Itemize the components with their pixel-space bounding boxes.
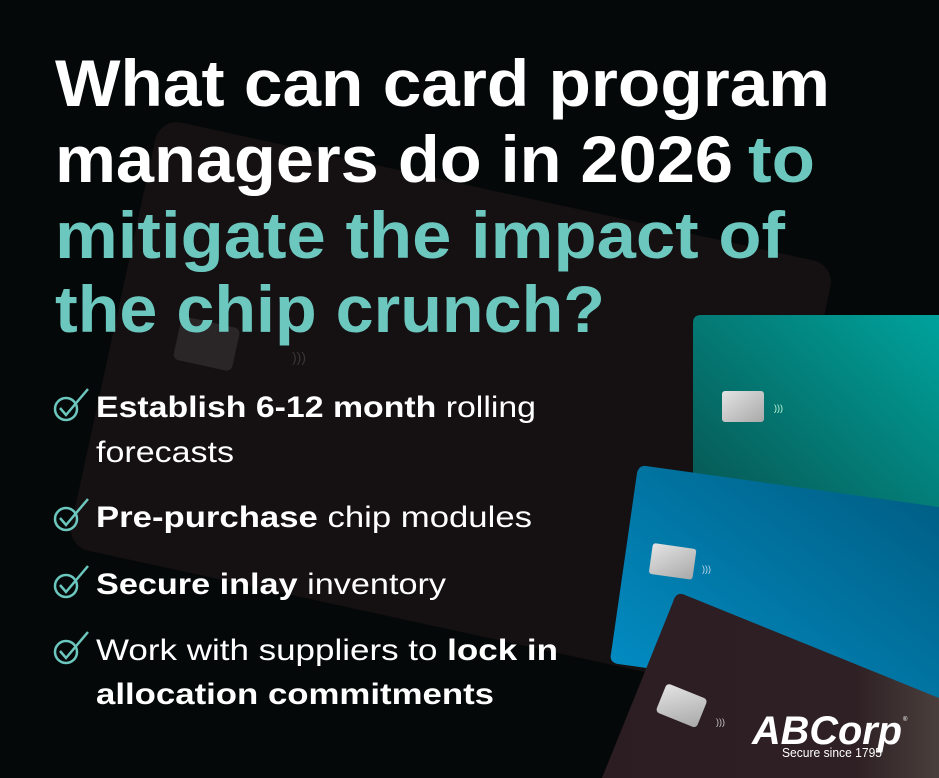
card: brown bbox=[602, 594, 939, 778]
card: blue bbox=[611, 466, 939, 709]
background card: dark: ))) bbox=[292, 349, 306, 365]
card: teal bbox=[693, 315, 939, 535]
bullet 1: Establish 6-12 month rolling bbox=[96, 391, 536, 424]
card: teal: ))) bbox=[774, 403, 783, 413]
title: mitigate the impact of bbox=[55, 198, 786, 272]
bullet list bbox=[55, 389, 558, 711]
card: brown: ))) bbox=[716, 717, 725, 727]
bullet 1 bbox=[55, 389, 536, 469]
title: managers do in 2026 bbox=[55, 122, 733, 196]
bullet 4: allocation commitments bbox=[96, 678, 494, 711]
bullet 1: forecasts bbox=[96, 436, 234, 469]
logo: ABCorp: ABCorp bbox=[751, 709, 902, 753]
title bbox=[55, 46, 830, 346]
title: What can card program bbox=[55, 46, 830, 120]
logo: ABCorp: ® bbox=[903, 716, 908, 723]
bullet 4: Work with suppliers to lock in bbox=[96, 634, 558, 667]
title: the chip crunch? bbox=[55, 272, 605, 346]
logo: ABCorp: Secure since 1795 bbox=[782, 745, 882, 760]
bullet 2: Pre-purchase chip modules bbox=[96, 501, 532, 534]
bullet 4 bbox=[55, 632, 558, 711]
bullet 3: Secure inlay inventory bbox=[96, 568, 446, 601]
background card: dark bbox=[67, 118, 835, 693]
title: to bbox=[748, 122, 815, 196]
card: blue: ))) bbox=[702, 564, 711, 574]
